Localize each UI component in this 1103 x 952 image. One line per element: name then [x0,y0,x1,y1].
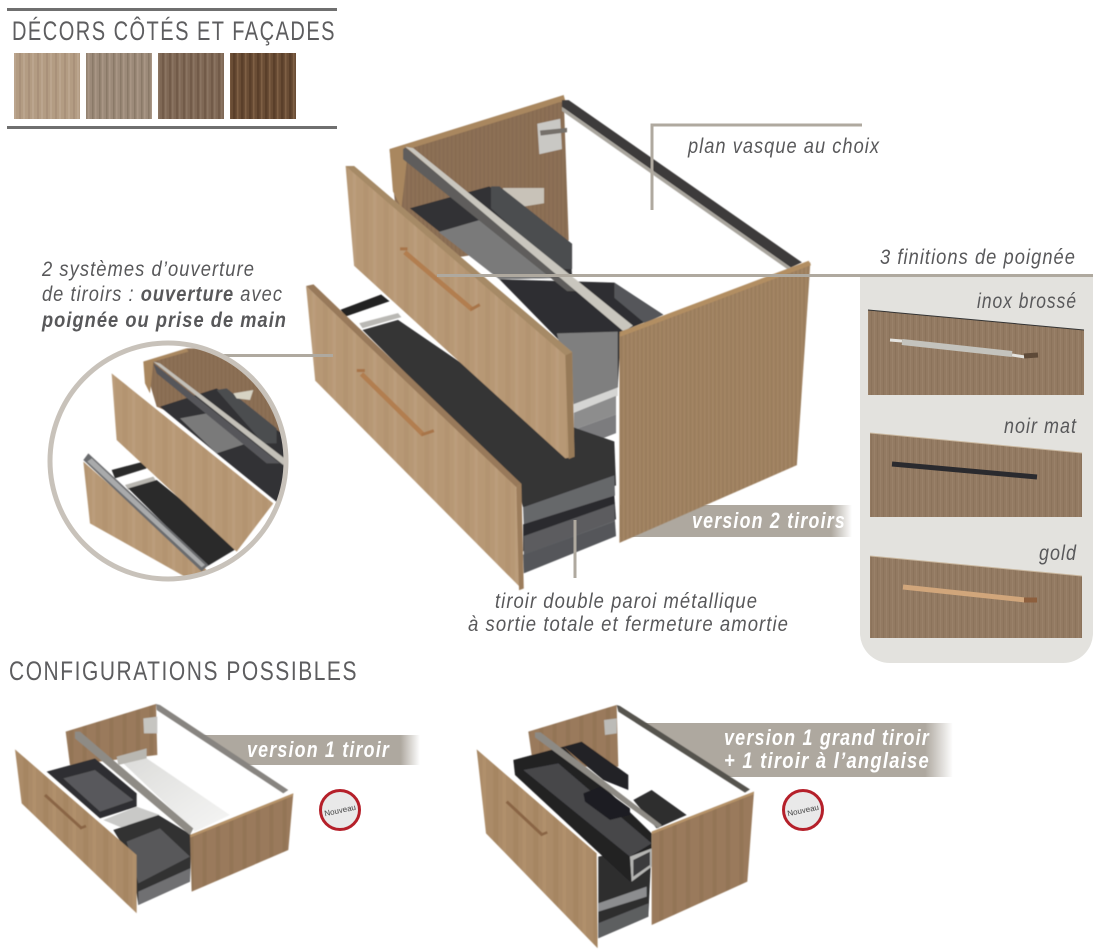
label: version 1 tiroir: version 1 tiroir [247,737,390,762]
panel: handle finishes background [860,275,1093,663]
badge: nouveau: Nouveau [787,803,820,818]
label: version 2 tiroirs: version 2 tiroirs [692,508,846,533]
rear rail [562,100,802,269]
white base [123,758,230,832]
handle panel: inox brossé [868,310,1084,395]
drawer interior [513,742,687,938]
leader line: tiroir double paroi [574,520,576,578]
illustration: version 1 grand tiroir + 1 tiroir à l'anglaise [477,705,754,948]
leader line: 3 finitions [437,274,1093,277]
hinge bracket [537,119,567,154]
panel: décors côtés et façades [7,8,337,129]
front rail [535,732,662,828]
swatch: decor 1 [14,53,80,119]
front rail [75,732,193,835]
drawer interior [47,758,192,905]
label: 2 systèmes d'ouverture [41,258,287,332]
label: tiroir double paroi [468,590,789,636]
drawer front [15,749,137,913]
back panel [528,705,618,767]
label: version 1 grand tiroir + 1 tiroir à l'anglaise [724,725,930,773]
rear rail [617,705,750,793]
illustration: main cabinet with 2 drawers [306,95,811,590]
label: 2 systèmes d'ouverture: 2 systèmes d’ouverture [41,258,255,281]
back panel [66,704,157,765]
banner: version 1 grand tiroir background [643,723,953,777]
handle panel: gold [870,556,1082,638]
upper drawer front [346,166,574,459]
label: version 1 grand tiroir + 1 tiroir à l'anglaise: version 1 grand tiroir [724,725,930,750]
illustration: version 1 tiroir [15,704,293,913]
hinge [604,718,617,735]
label: 3 finitions de poignée: 3 finitions de poignée [880,246,1076,269]
handle [45,795,86,828]
label: plan vasque au choix: plan vasque au choix [687,135,880,158]
badge: nouveau [784,790,822,830]
handle: upper drawer [400,249,480,310]
label: 2 systèmes d'ouverture: de tiroirs : ouverture avec [42,283,283,306]
lower drawer interior [341,294,616,573]
heading: décors: DÉCORS CÔTÉS ET FAÇADES [12,15,336,46]
rear rail [156,704,288,793]
label: noir mat: noir mat [1004,415,1077,438]
label: gold: gold [1039,542,1077,565]
heading: configurations possibles: CONFIGURATIONS POSSIBLES [9,656,358,686]
label: inox brossé: inox brossé [977,290,1077,313]
banner: version 2 tiroirs background [620,505,852,537]
right side panel [190,793,293,892]
badge: nouveau: Nouveau [324,803,357,818]
right side panel [619,261,811,543]
handle: lower drawer [357,371,434,435]
upper drawer interior [410,186,663,449]
leader line: plan vasque [652,125,862,210]
detail circle: hand grip opening [50,343,287,583]
swatch: decor 3 [158,53,224,119]
drawer front [477,749,598,948]
handle panel: noir mat [870,433,1082,517]
swatch: decor 2 [86,53,152,119]
label: version 1 grand tiroir + 1 tiroir à l'anglaise: + 1 tiroir à l’anglaise [724,748,930,773]
label: tiroir double paroi: tiroir double paroi métallique [495,590,758,613]
label: 2 systèmes d'ouverture: poignée ou prise de main [41,309,287,332]
front rail [403,147,633,332]
handle [507,802,547,835]
swatch: decor 4 [230,53,296,119]
label: tiroir double paroi: à sortie totale et fermeture amortie [468,613,789,636]
lower drawer front [306,284,524,590]
right side panel [652,792,754,925]
banner: version 1 tiroir background [203,735,420,765]
hinge [117,717,157,765]
leader line: ouverture [222,354,333,357]
back panel [390,95,569,266]
badge: nouveau [320,790,360,830]
